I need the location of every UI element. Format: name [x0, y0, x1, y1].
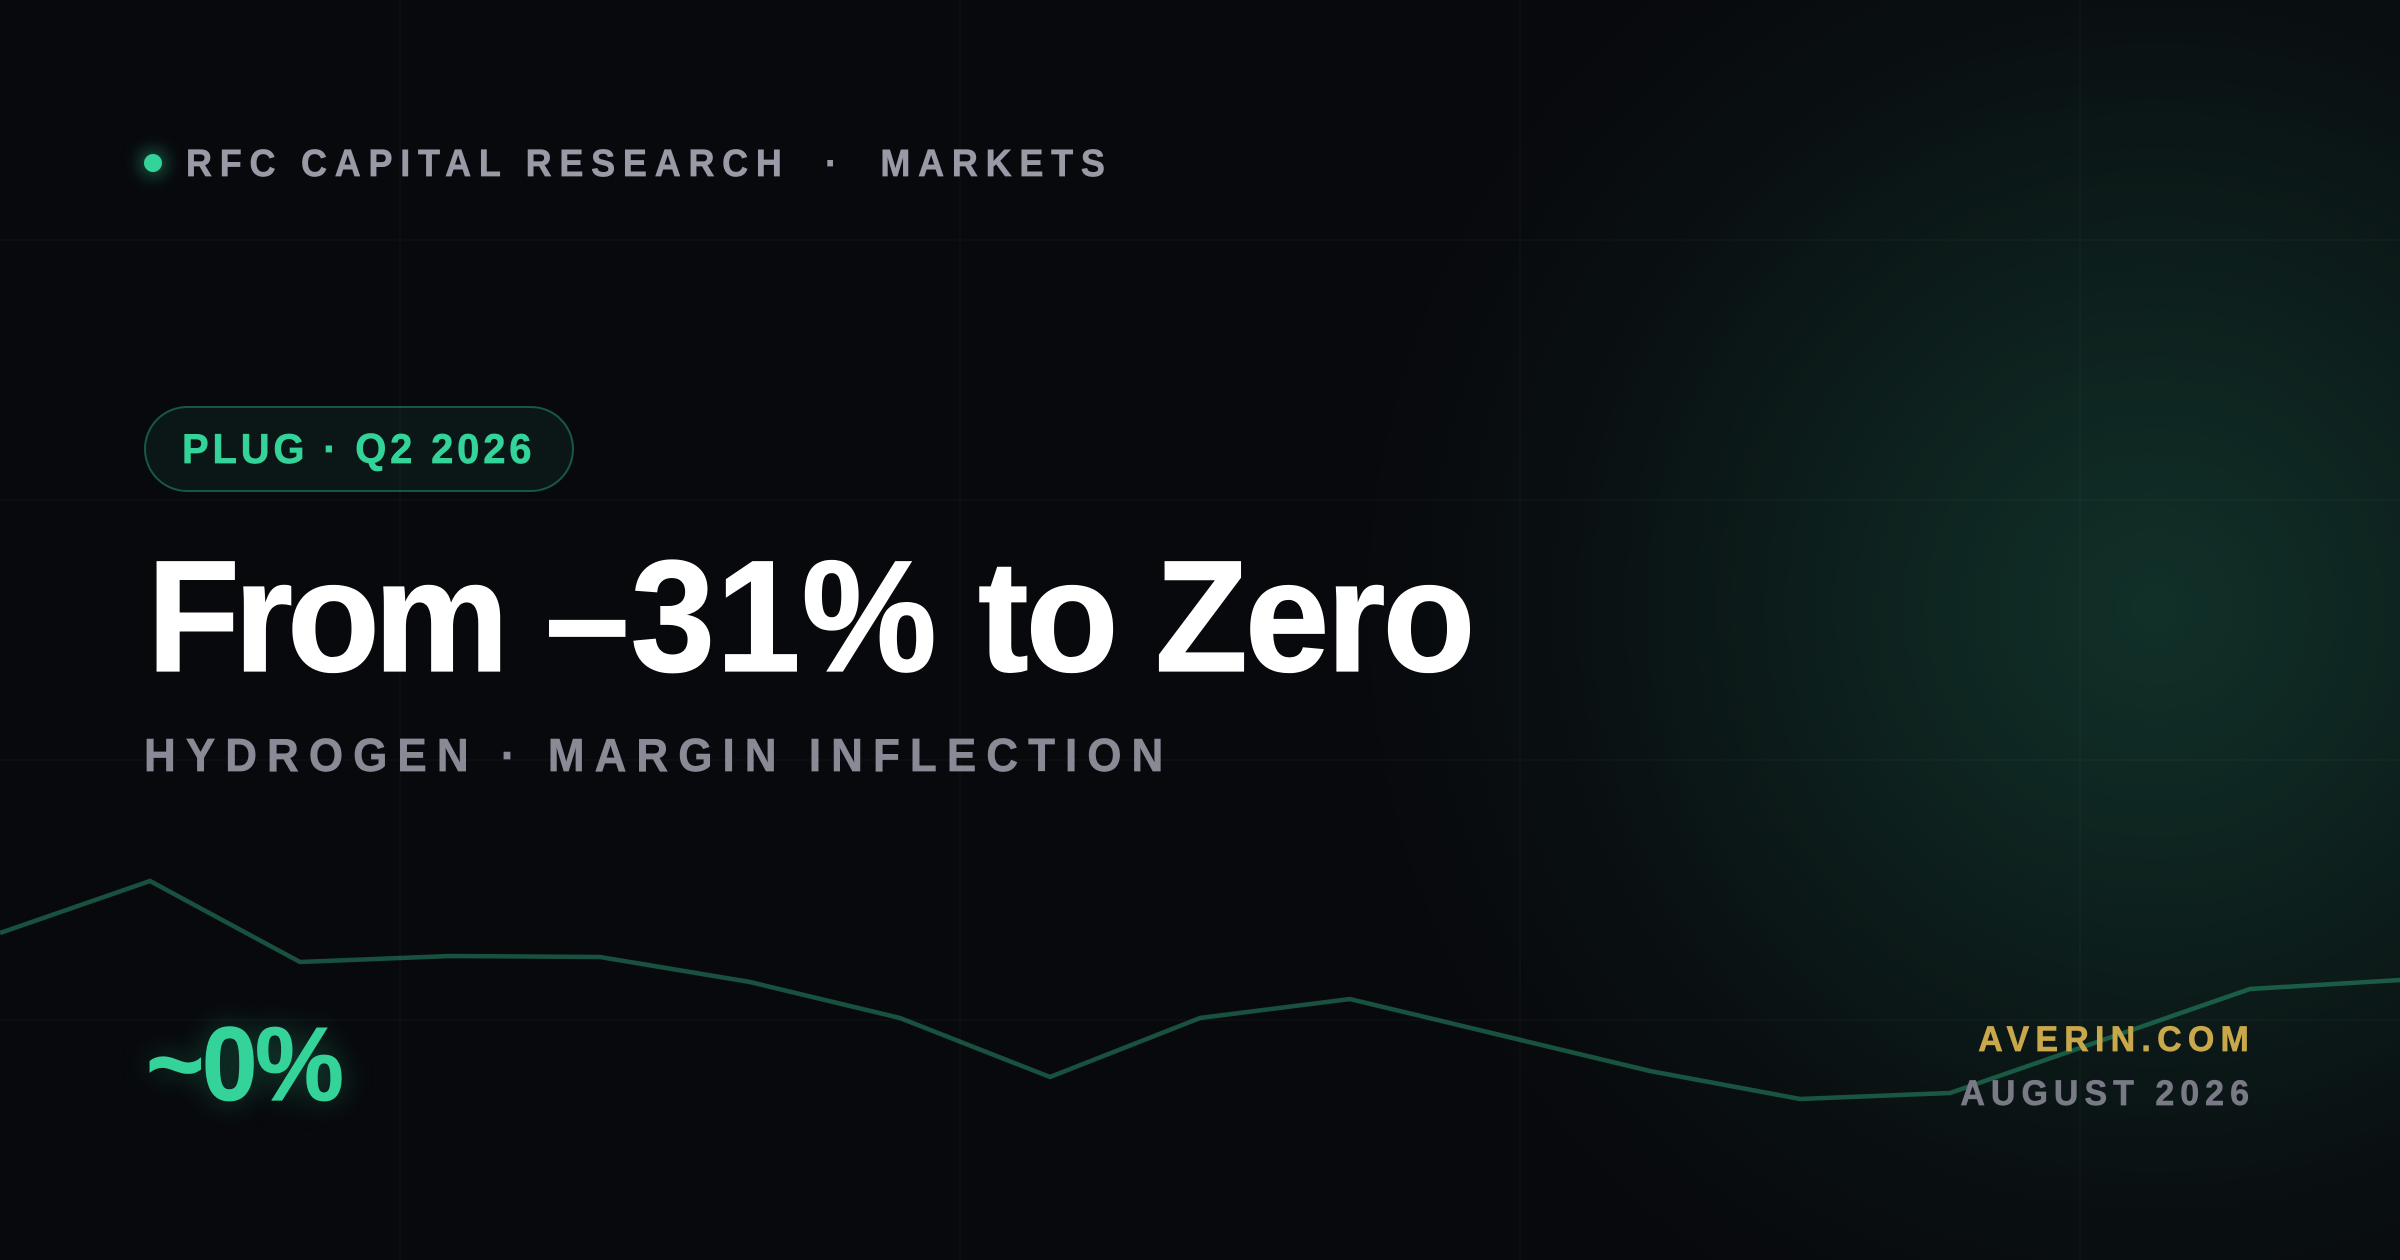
title: Zero [1155, 528, 1472, 705]
ticker pill [144, 406, 574, 492]
pill text: PLUG · Q2 2026 [182, 426, 535, 472]
footer: site and date [1960, 1020, 2255, 1113]
big stat: ~0% [146, 1006, 341, 1123]
title: From [147, 528, 503, 705]
subtitle: HYDROGEN · MARGIN INFLECTION [144, 730, 1173, 781]
title: –31% [545, 528, 938, 705]
date: AUGUST 2026 [1960, 1074, 2255, 1113]
eyebrow text: RFC CAPITAL RESEARCH · MARKETS [186, 141, 1113, 184]
site name: AVERIN.COM [1978, 1020, 2255, 1059]
icon: status dot [144, 154, 162, 172]
header: eyebrow [132, 141, 1113, 184]
title [147, 528, 1472, 705]
title: to [978, 528, 1115, 705]
chart: sparkline [0, 881, 2400, 1099]
